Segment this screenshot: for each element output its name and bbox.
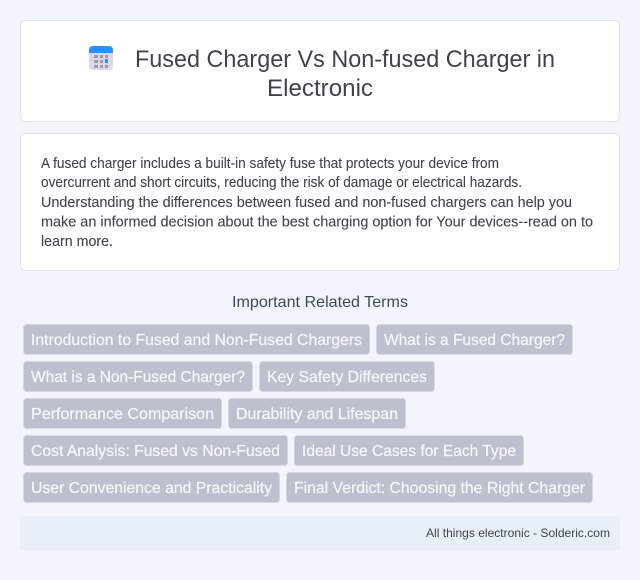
text block: description [41,156,593,250]
tag: Introduction to Fused and Non-Fused Chargers [31,332,362,349]
text block: description: Understanding the differences between fused and non-fused chargers can help you [41,195,572,211]
tag [24,362,252,392]
footer [20,516,620,550]
tag [24,324,370,354]
tag: User Convenience and Practicality [31,480,272,497]
tag [24,436,288,466]
panel: description [20,134,620,270]
text block: description: learn more. [41,234,113,250]
tag [376,324,572,354]
panel: title card [20,20,620,122]
tag [294,436,524,466]
tag [228,398,406,428]
tag: What is a Fused Charger? [384,332,565,349]
tag [260,362,434,392]
tag: Cost Analysis: Fused vs Non-Fused [31,443,280,460]
tag [24,398,222,428]
tag: Ideal Use Cases for Each Type [302,443,516,460]
footer: All things electronic - Solderic.com [426,526,610,540]
tag: What is a Non-Fused Charger? [31,369,245,386]
tag: Key Safety Differences [267,369,427,386]
tag list [24,324,592,502]
title [135,46,555,102]
title: Fused Charger Vs Non-fused Charger in [135,46,555,73]
title: Electronic [267,75,373,102]
text block: description: make an informed decision about the best charging option for Your devices--read on to [41,214,593,230]
tag [24,472,280,502]
tag: Durability and Lifespan [236,406,398,423]
heading: related terms: Important Related Terms [232,294,408,311]
tag [286,472,592,502]
text block: description: A fused charger includes a built-in safety fuse that protects your device from [41,156,499,172]
text block: description: overcurrent and short circuits, reducing the risk of damage or electrical hazards. [41,175,522,191]
tag: Final Verdict: Choosing the Right Charger [294,480,586,497]
tag: Performance Comparison [31,406,214,423]
icon: calendar [89,46,113,70]
